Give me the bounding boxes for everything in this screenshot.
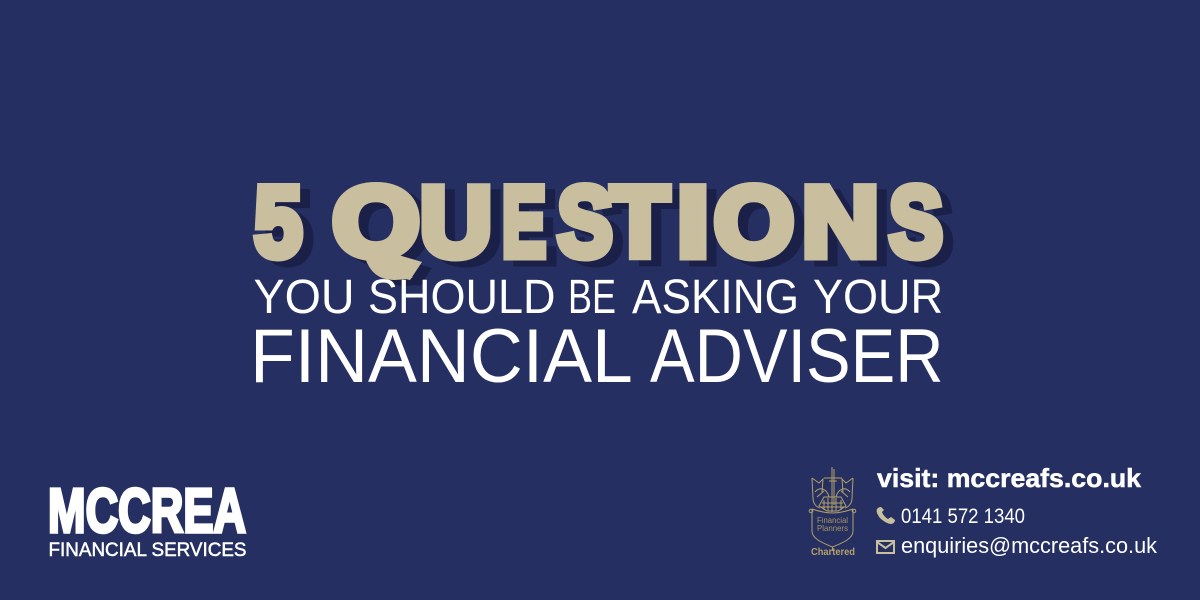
icon: chartered financial planners crest (809, 467, 856, 551)
title: 5 questions: O (714, 166, 794, 277)
contact: phone number: 0141 572 1340 (901, 505, 1025, 528)
crest label: chartered: Chartered (811, 547, 855, 558)
subtitle line: you should be asking your: YOUR (813, 271, 943, 324)
crest label: financial planners: Financial (817, 516, 848, 525)
subtitle line: you should be asking your: ASKING (632, 271, 799, 324)
icon: envelope (877, 541, 894, 553)
subtitle line: financial adviser: FINANCIAL (250, 314, 631, 399)
contact: website: visit: mccreafs.co.uk (877, 463, 1142, 493)
logo: McCrea Financial Services (48, 476, 246, 561)
title: 5 questions: E (502, 166, 546, 277)
icon: chartered financial planners crest: Planners (817, 524, 848, 533)
subtitle line: you should be asking your: SHOULD (368, 271, 556, 324)
subtitle line: you should be asking your: YOU (254, 271, 354, 324)
subtitle line: financial adviser: ADVISER (650, 314, 944, 399)
title: 5 questions: 5 (254, 166, 302, 277)
icon: phone (877, 507, 895, 524)
title: 5 questions: I (677, 166, 709, 277)
title: 5 questions: N (802, 166, 879, 277)
contact: email: enquiries@mccreafs.co.uk (901, 533, 1158, 558)
title: 5 questions (254, 166, 943, 280)
title: 5 questions: T (611, 166, 669, 277)
logo: McCrea Financial Services: MCCREA (48, 476, 246, 546)
title: 5 questions: U (420, 166, 492, 277)
title: 5 questions: Q (332, 166, 420, 277)
title: 5 questions: S (889, 166, 943, 277)
title: 5 questions: S (558, 166, 612, 277)
subtitle line: you should be asking your: BE (568, 271, 616, 324)
logo: McCrea Financial Services: FINANCIAL SERVICES (48, 539, 246, 561)
